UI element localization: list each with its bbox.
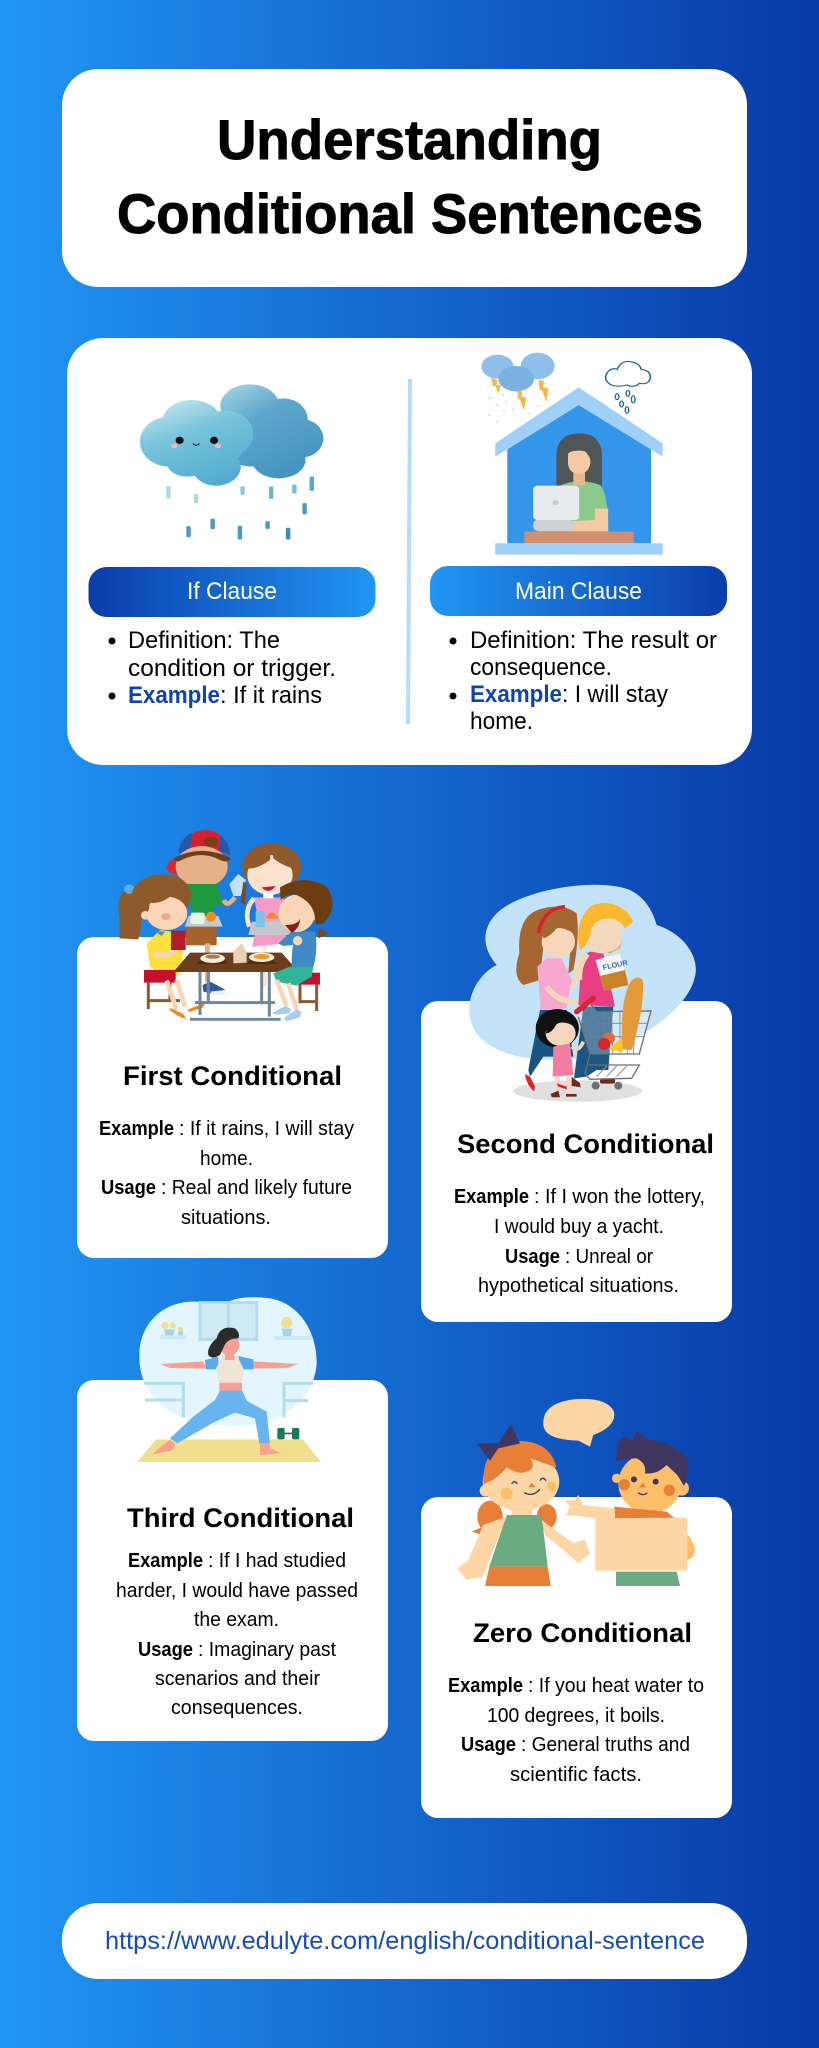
text: zero conditional: : If you heat water to <box>528 1674 704 1697</box>
heading: Second Conditional <box>457 1129 714 1159</box>
shopping cart <box>577 978 651 1090</box>
text: third conditional: : If I had studied <box>208 1549 346 1572</box>
text: third conditional <box>116 1549 358 1719</box>
card: second conditional <box>421 885 732 1322</box>
title: Conditional Sentences <box>117 182 703 245</box>
icon: outline cloud with drops <box>606 361 650 413</box>
text: second conditional: Usage <box>505 1245 560 1268</box>
url pill <box>62 1903 747 1979</box>
illustration: yoga <box>137 1297 321 1462</box>
illustration: family shopping <box>469 885 696 1102</box>
text: first conditional: situations. <box>181 1206 271 1229</box>
text: first conditional: Usage <box>101 1176 156 1199</box>
text: zero conditional: scientific facts. <box>510 1763 642 1786</box>
pill: main clause <box>430 566 727 616</box>
text: zero conditional: Example <box>448 1674 523 1697</box>
text: zero conditional: : General truths and <box>521 1733 690 1756</box>
table <box>173 943 299 1019</box>
girl <box>457 1424 590 1586</box>
text: main clause bullets: home. <box>470 708 533 735</box>
text: if clause bullets: condition or trigger. <box>128 655 336 682</box>
boy <box>166 830 246 995</box>
text: zero conditional: Usage <box>461 1733 516 1756</box>
text: zero conditional <box>448 1674 704 1786</box>
text: second conditional: : If I won the lottery, <box>534 1185 705 1208</box>
illustration: two kids talking <box>457 1399 695 1586</box>
title <box>117 108 703 245</box>
pill: if clause <box>88 567 376 617</box>
text: main clause bullets: consequence. <box>470 654 612 681</box>
text: second conditional: hypothetical situations. <box>478 1274 679 1297</box>
text: second conditional: : Unreal or <box>565 1245 653 1268</box>
icon: storm clouds <box>481 353 555 422</box>
icon: rain cloud <box>140 384 323 540</box>
card: third conditional <box>77 1297 388 1741</box>
heading: Third Conditional <box>127 1503 354 1533</box>
divider <box>408 379 410 724</box>
pill: if clause: If Clause <box>187 578 277 605</box>
text: main clause bullets: : I will stay <box>562 681 668 708</box>
pill: main clause: Main Clause <box>515 578 642 605</box>
woman with brown hair <box>516 907 585 1091</box>
text: if clause bullets: Example <box>128 682 220 709</box>
dumbbell <box>277 1428 299 1439</box>
icon: house with person <box>495 387 663 555</box>
text: second conditional: I would buy a yacht. <box>494 1215 664 1238</box>
text: first conditional: home. <box>200 1147 253 1170</box>
speech bubble <box>543 1399 614 1447</box>
panel: clauses <box>67 338 752 765</box>
text: second conditional: Example <box>454 1185 529 1208</box>
text: zero conditional: 100 degrees, it boils. <box>487 1704 665 1727</box>
text: third conditional: Usage <box>138 1638 193 1661</box>
illustration: children at lunch table <box>118 830 333 1021</box>
card: zero conditional <box>421 1399 732 1818</box>
text: if clause bullets: Definition: The <box>128 627 280 654</box>
blonde woman: FLOUR <box>602 958 629 972</box>
girl in pink <box>241 843 301 986</box>
boy <box>565 1431 695 1586</box>
title card <box>62 69 747 287</box>
person <box>170 1389 270 1443</box>
girl in yellow <box>118 874 205 1019</box>
text: third conditional: consequences. <box>171 1696 303 1719</box>
text: third conditional: harder, I would have passed <box>116 1579 358 1602</box>
heading: First Conditional <box>123 1061 342 1091</box>
text: first conditional: : Real and likely future <box>161 1176 352 1199</box>
text: third conditional: : Imaginary past <box>198 1638 336 1661</box>
card: first conditional <box>77 830 388 1258</box>
text: if clause bullets <box>108 627 336 709</box>
url pill: https://www.edulyte.com/english/conditional-sentence <box>105 1927 705 1955</box>
blonde woman <box>572 903 633 1087</box>
text: main clause bullets: Definition: The result or <box>470 627 717 654</box>
text: main clause bullets <box>450 627 717 735</box>
text: if clause bullets: : If it rains <box>220 682 322 709</box>
heading: Zero Conditional <box>473 1618 692 1648</box>
text: third conditional: scenarios and their <box>155 1667 320 1690</box>
text: third conditional: the exam. <box>194 1608 279 1631</box>
kid on right <box>272 880 333 1021</box>
text: first conditional: Example <box>99 1117 174 1140</box>
child <box>536 1009 583 1097</box>
title: Understanding <box>217 108 602 171</box>
text: second conditional <box>454 1185 705 1297</box>
text: main clause bullets: Example <box>470 681 562 708</box>
text: first conditional: : If it rains, I will stay <box>179 1117 355 1140</box>
text: third conditional: Example <box>128 1549 203 1572</box>
text: first conditional <box>99 1117 355 1229</box>
